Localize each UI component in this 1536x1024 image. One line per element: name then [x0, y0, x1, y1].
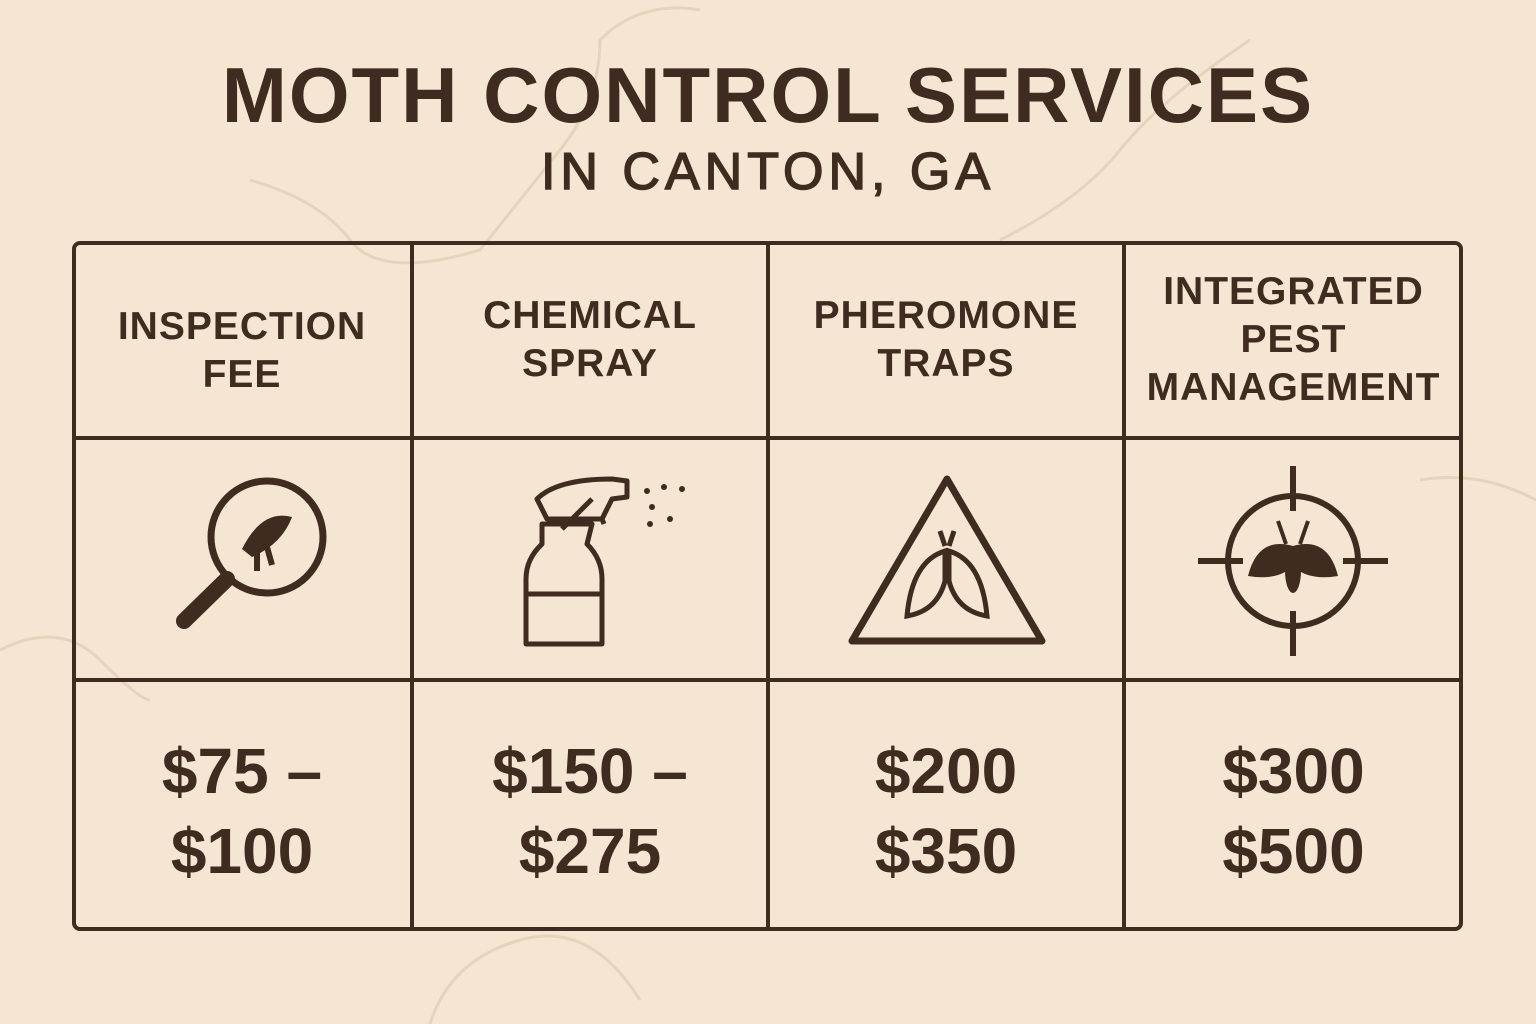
icon: magnifying glass with moth: [176, 478, 326, 629]
header: chemical spray: SPRAY: [522, 342, 658, 384]
table: [72, 241, 1463, 931]
icon: warning triangle with moth: [848, 476, 1046, 644]
header: pheromone traps: [814, 294, 1078, 384]
header: pheromone traps: PHEROMONE: [814, 294, 1078, 336]
header: chemical spray: [483, 294, 697, 384]
price: inspection: $100: [171, 815, 313, 887]
header: integrated pest management: MANAGEMENT: [1147, 366, 1440, 408]
price: pheromone traps: $350: [875, 815, 1017, 887]
header: inspection fee: INSPECTION: [118, 305, 366, 348]
icon: spray bottle: [524, 476, 685, 646]
price: integrated pest management: [1222, 735, 1365, 887]
header: inspection fee: [118, 305, 366, 396]
price: chemical spray: $150 –: [492, 735, 688, 807]
subtitle: IN CANTON, GA: [541, 143, 995, 201]
header: inspection fee: FEE: [203, 353, 281, 396]
header: integrated pest management: INTEGRATED: [1163, 270, 1424, 312]
price: inspection: $75 –: [162, 735, 322, 807]
price: inspection: [162, 735, 322, 887]
header: chemical spray: CHEMICAL: [483, 294, 697, 336]
price: pheromone traps: $200: [875, 735, 1017, 807]
header: pheromone traps: TRAPS: [877, 342, 1015, 384]
price: integrated pest management: $500: [1222, 815, 1365, 887]
price: pheromone traps: [875, 735, 1017, 887]
header: integrated pest management: [1147, 270, 1440, 408]
header: integrated pest management: PEST: [1241, 318, 1346, 360]
title: MOTH CONTROL SERVICES: [222, 51, 1314, 139]
price: chemical spray: [492, 735, 688, 887]
price: integrated pest management: $300: [1222, 735, 1365, 807]
price: chemical spray: $275: [519, 815, 661, 887]
icon: crosshair with moth: [1198, 466, 1388, 656]
